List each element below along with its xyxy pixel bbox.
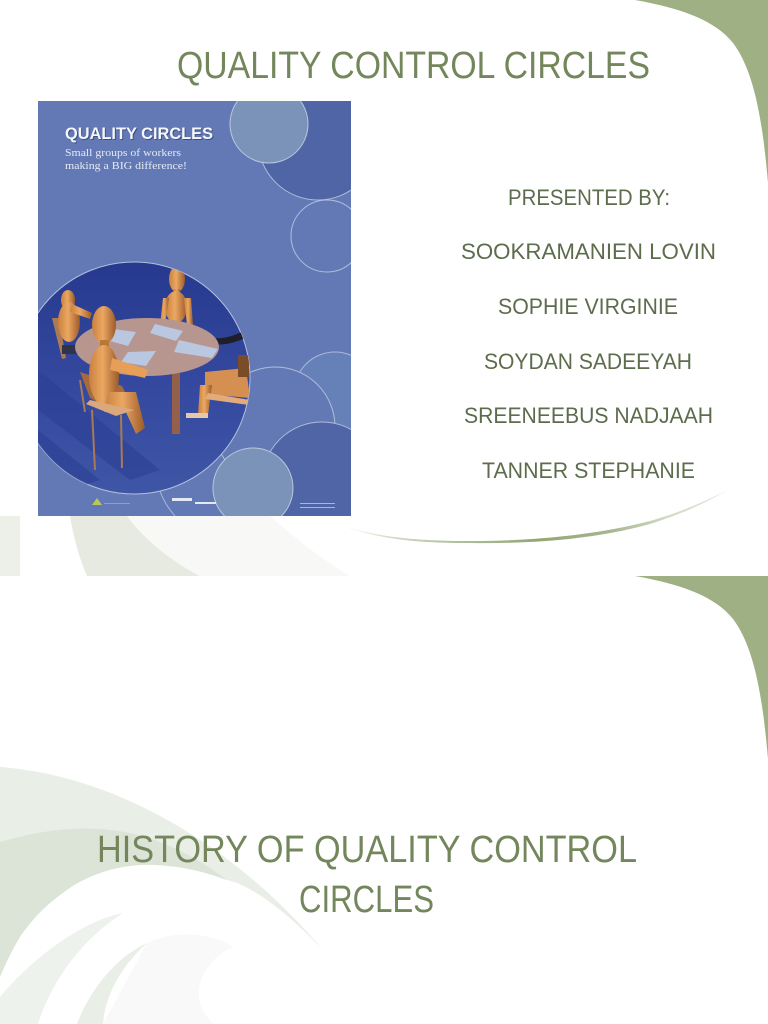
slide 2 heading: CIRCLES (299, 879, 434, 921)
table top (75, 318, 219, 376)
cover subtitle: making a BIG difference! (65, 160, 187, 172)
cover title: QUALITY CIRCLES (66, 125, 214, 144)
back figure (160, 266, 193, 325)
presenters list: PRESENTED BY: (508, 185, 670, 210)
slide 2 bottom left wave motif (0, 767, 322, 1024)
presenters list: TANNER STEPHANIE (482, 458, 695, 483)
cover footer marks (92, 498, 335, 508)
presenters list: SOYDAN SADEEYAH (484, 349, 692, 374)
presenters list: SOPHIE VIRGINIE (498, 294, 678, 319)
front figure with chair (80, 306, 148, 470)
left figure (52, 290, 92, 359)
slide 1 bottom swoosh line (340, 487, 733, 543)
cover title: QUALITY CIRCLES (65, 124, 213, 143)
right figure arm (216, 332, 244, 344)
slide 1 bottom left wave motif (0, 516, 200, 576)
slide 2 heading (97, 829, 637, 921)
presenters list: SREENEEBUS NADJAAH (464, 403, 713, 428)
table leg (172, 368, 180, 434)
right figure (186, 355, 250, 418)
cover circles (160, 101, 351, 516)
slide 1 title: QUALITY CONTROL CIRCLES (177, 45, 650, 87)
slide 2 heading: HISTORY OF QUALITY CONTROL (97, 829, 637, 871)
slide 1 corner swoosh (635, 0, 768, 183)
papers on table (110, 324, 218, 366)
cover subtitle (65, 147, 187, 172)
slide 2 corner swoosh (635, 576, 768, 759)
book cover image (38, 101, 351, 516)
floor shadows (38, 405, 160, 484)
presenters list: SOOKRAMANIEN LOVIN (461, 239, 716, 264)
meeting scene circle (18, 262, 250, 494)
presenters list (461, 185, 716, 483)
cover subtitle: Small groups of workers (65, 147, 181, 159)
